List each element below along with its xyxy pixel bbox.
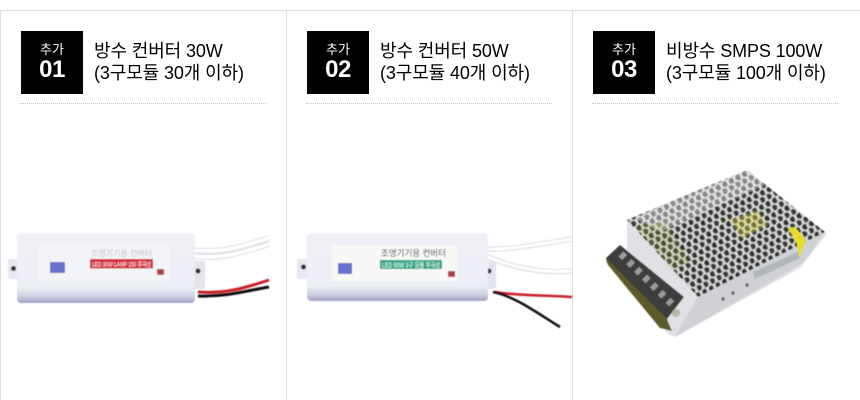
badge 02: 02 bbox=[325, 56, 351, 83]
heading 03: (3구모듈 100개 이하) bbox=[666, 63, 826, 83]
converter 50W bbox=[297, 233, 572, 327]
heading 02: 방수 컨버터 50W bbox=[380, 41, 509, 61]
panel: product 02 bbox=[287, 10, 573, 400]
badge 02 bbox=[307, 31, 369, 94]
heading 02 bbox=[380, 41, 530, 83]
heading 03 bbox=[666, 41, 826, 83]
badge 01: 추가 bbox=[40, 42, 64, 57]
badge 01 bbox=[21, 31, 83, 94]
converter 30W: LED 30W LAMP 150 무극성 bbox=[92, 260, 151, 268]
converter 50W: 조명기기용 컨버터 bbox=[381, 248, 446, 258]
heading 01: (3구모듈 30개 이하) bbox=[94, 63, 244, 83]
badge 03: 03 bbox=[611, 56, 637, 83]
converter 30W: 조명기기용 컨버터 bbox=[91, 248, 152, 258]
heading 01: 방수 컨버터 30W bbox=[94, 41, 223, 61]
power supply SMPS 100W bbox=[606, 170, 826, 337]
badge 03 bbox=[593, 31, 655, 94]
heading 03: 비방수 SMPS 100W bbox=[666, 41, 822, 61]
panel: product 01 bbox=[0, 10, 287, 400]
badge 02: 추가 bbox=[326, 42, 350, 57]
heading 01 bbox=[94, 41, 244, 83]
converter 30W bbox=[8, 233, 269, 303]
badge 01: 01 bbox=[39, 56, 65, 83]
heading 02: (3구모듈 40개 이하) bbox=[380, 63, 530, 83]
converter 50W: LED 50W 3구 모듈 무극성 bbox=[382, 260, 440, 270]
panel: product 03 bbox=[573, 10, 860, 400]
badge 03: 추가 bbox=[612, 42, 636, 57]
